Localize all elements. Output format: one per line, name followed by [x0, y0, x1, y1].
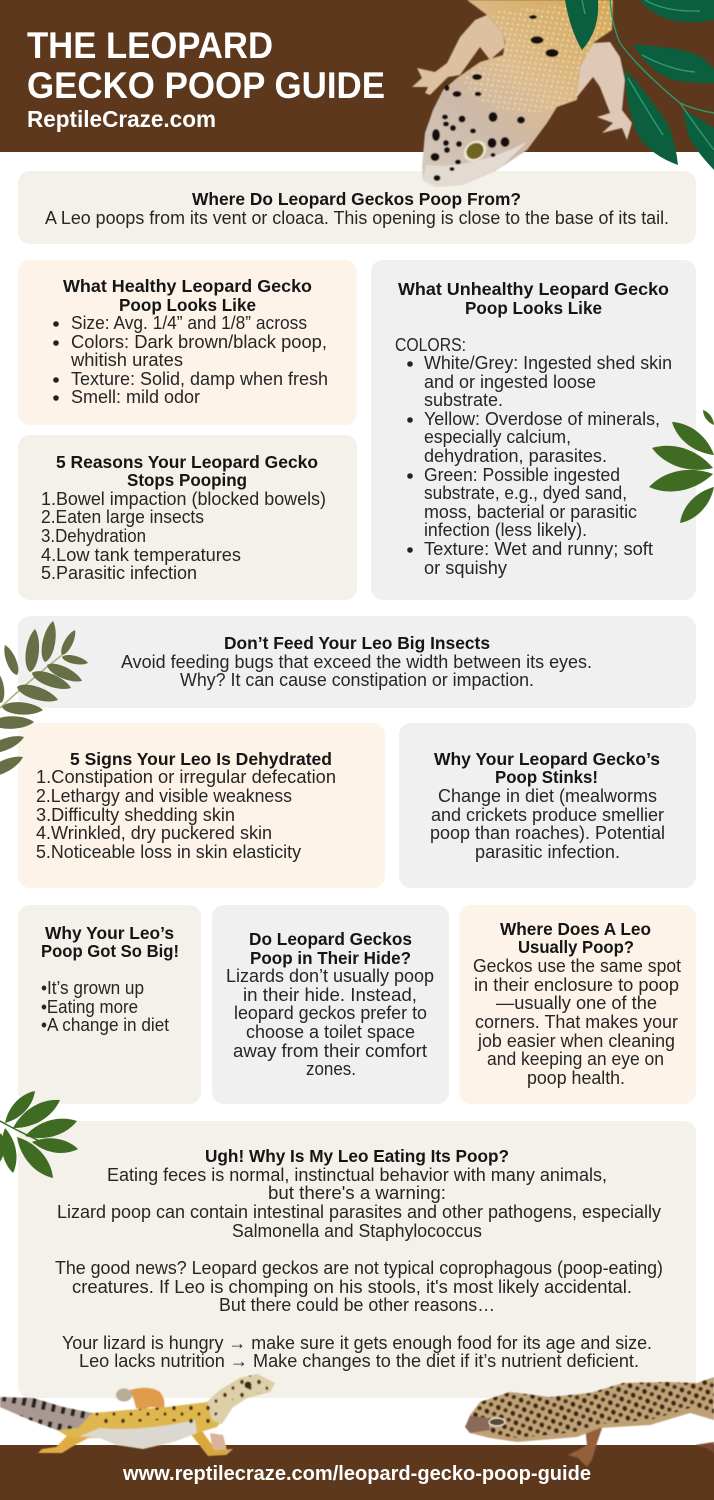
- tail: [0, 1397, 92, 1430]
- panel: unhealthy poop: substrate, e.g., dyed sand,: [424, 483, 627, 503]
- icon: olive leaves left: [0, 620, 89, 780]
- header band: [0, 0, 714, 152]
- panel: poop in hide: choose a toilet space: [246, 1022, 415, 1042]
- panel: where leo usually poops: in their enclosure to poop: [474, 975, 679, 995]
- body: [465, 1377, 714, 1442]
- panel: where do geckos poop from: A Leo poops from its vent or cloaca. This opening is close to the base of its tail.: [45, 208, 669, 228]
- body: [0, 1374, 275, 1449]
- panel: why poop got big: •A change in diet: [41, 1015, 169, 1035]
- panel: where leo usually poops: job easier when cleaning: [477, 1031, 675, 1051]
- panel: why poop got big: Poop Got So Big!: [41, 941, 179, 961]
- snout: [465, 1416, 490, 1433]
- panel: unhealthy poop: Green: Possible ingested: [424, 465, 620, 485]
- panel: signs of dehydration: 5.Noticeable loss in skin elasticity: [36, 842, 301, 862]
- footer band: [0, 1445, 714, 1500]
- panel: don't feed big insects: Avoid feeding bugs that exceed the width between its eyes.: [121, 652, 592, 672]
- title: GECKO POOP GUIDE: [27, 65, 385, 106]
- panel: unhealthy poop: moss, bacterial or parasitic: [424, 502, 637, 522]
- panel: signs of dehydration: 4.Wrinkled, dry puckered skin: [36, 823, 272, 843]
- panel: signs of dehydration: 5 Signs Your Leo Is Dehydrated: [70, 749, 332, 769]
- panel: poop in hide: Poop in Their Hide?: [250, 948, 411, 968]
- panel: reasons gecko stops pooping: 5.Parasitic infection: [41, 563, 197, 583]
- panel: healthy poop: Poop Looks Like: [119, 295, 256, 315]
- panel: healthy poop: Smell: mild odor: [71, 387, 200, 407]
- panel: why poop stinks: Why Your Leopard Gecko’s: [434, 749, 660, 769]
- panel: don't feed big insects: [18, 616, 696, 708]
- panel: why poop stinks: poop than roaches). Potential: [430, 823, 665, 843]
- panel: unhealthy poop: infection (less likely).: [424, 520, 587, 540]
- panel: healthy poop: Size: Avg. 1/4” and 1/8” across: [71, 313, 307, 333]
- panel: unhealthy poop: or squishy: [424, 558, 507, 578]
- panel: where leo usually poops: Geckos use the same spot: [473, 956, 681, 976]
- panel: reasons gecko stops pooping: [18, 435, 357, 600]
- panel: poop in hide: [212, 905, 449, 1104]
- title: THE LEOPARD: [27, 25, 273, 66]
- panel: eating its poop: Eating feces is normal, instinctual behavior with many animals,: [107, 1165, 607, 1185]
- illustration: gecko top: [412, 0, 632, 187]
- panel: signs of dehydration: 2.Lethargy and visible weakness: [36, 786, 292, 806]
- head: [207, 1374, 275, 1424]
- panel: signs of dehydration: [18, 723, 385, 888]
- panel: poop in hide: in their hide. Instead,: [243, 985, 417, 1005]
- panel: why poop stinks: Change in diet (mealworms: [438, 786, 657, 806]
- body spots: [430, 15, 558, 181]
- illustration: leaves top right: [565, 0, 714, 170]
- panel: eating its poop: But there could be other reasons…: [219, 1295, 495, 1315]
- panel: poop in hide: zones.: [306, 1059, 356, 1079]
- illustration: spotted gecko bottom right: [465, 1377, 714, 1467]
- panel: where leo usually poops: corners. That makes your: [475, 1012, 678, 1032]
- panel: healthy poop: Colors: Dark brown/black poop,: [71, 332, 327, 352]
- title: [27, 25, 385, 106]
- panel: unhealthy poop: substrate.: [424, 390, 503, 410]
- panel: why poop stinks: parasitic infection.: [475, 842, 620, 862]
- panel: why poop stinks: [399, 723, 696, 888]
- panel: unhealthy poop: [371, 260, 696, 600]
- panel: why poop stinks: Poop Stinks!: [495, 767, 598, 787]
- panel: poop in hide: leopard geckos prefer to: [234, 1003, 427, 1023]
- panel: where do geckos poop from: [18, 171, 696, 244]
- footer url: www.reptilecraze.com/leopard-gecko-poop-guide: [122, 1463, 591, 1485]
- panel: eating its poop: Salmonella and Staphylococcus: [232, 1221, 482, 1241]
- panel: why poop got big: •Eating more: [41, 997, 138, 1017]
- panel: where leo usually poops: Usually Poop?: [518, 937, 634, 957]
- panel: reasons gecko stops pooping: 2.Eaten large insects: [41, 507, 204, 527]
- panel: signs of dehydration: 3.Difficulty shedding skin: [36, 805, 235, 825]
- panel: healthy poop: Texture: Solid, damp when fresh: [71, 369, 328, 389]
- panel: where leo usually poops: Where Does A Leo: [500, 919, 651, 939]
- icon: green leaves lower left: [0, 1086, 79, 1183]
- panel: where do geckos poop from: Where Do Leopard Geckos Poop From?: [192, 189, 521, 209]
- panel: unhealthy poop: dehydration, parasites.: [424, 446, 607, 466]
- panel: where leo usually poops: [459, 905, 696, 1104]
- panel: reasons gecko stops pooping: Stops Pooping: [127, 470, 247, 490]
- panel: eating its poop: Ugh! Why Is My Leo Eating Its Poop?: [205, 1146, 509, 1166]
- panel: healthy poop: [18, 260, 357, 425]
- panel: eating its poop: The good news? Leopard geckos are not typical coprophagous (poop-eating): [55, 1258, 663, 1278]
- panel: unhealthy poop: Texture: Wet and runny; soft: [424, 539, 653, 559]
- panel: unhealthy poop: especially calcium,: [424, 427, 571, 447]
- panel: signs of dehydration: 1.Constipation or irregular defecation: [36, 767, 336, 787]
- panel: eating its poop: [18, 1121, 696, 1398]
- panel: eating its poop: creatures. If Leo is chomping on his stools, it's most likely accidental.: [72, 1277, 632, 1297]
- panel: unhealthy poop: What Unhealthy Leopard Gecko: [398, 279, 669, 299]
- panel: eating its poop: Your lizard is hungry → make sure it gets enough food for its age and size.: [62, 1333, 652, 1353]
- panel: why poop got big: Why Your Leo’s: [45, 923, 174, 943]
- panel: unhealthy poop: COLORS:: [395, 335, 466, 355]
- panel: don't feed big insects: Don’t Feed Your Leo Big Insects: [224, 633, 490, 653]
- panel: unhealthy poop: White/Grey: Ingested shed skin: [424, 353, 672, 373]
- panel: where leo usually poops: poop health.: [527, 1068, 625, 1088]
- panel: reasons gecko stops pooping: 1.Bowel impaction (blocked bowels): [41, 489, 326, 509]
- panel: reasons gecko stops pooping: 3.Dehydration: [41, 526, 146, 546]
- panel: unhealthy poop: Poop Looks Like: [465, 298, 602, 318]
- rear foot: [695, 1442, 714, 1453]
- panel: eating its poop: Leo lacks nutrition → Make changes to the diet if it’s nutrient deficient.: [79, 1351, 639, 1371]
- panel: unhealthy poop: Yellow: Overdose of minerals,: [424, 409, 660, 429]
- front leg: [568, 1425, 603, 1467]
- panel: poop in hide: Do Leopard Geckos: [249, 929, 412, 949]
- panel: healthy poop: What Healthy Leopard Gecko: [63, 276, 312, 296]
- legs: [38, 1423, 100, 1453]
- panel: healthy poop: whitish urates: [70, 350, 183, 370]
- panel: don't feed big insects: Why? It can cause constipation or impaction.: [180, 670, 534, 690]
- panel: reasons gecko stops pooping: 5 Reasons Your Leopard Gecko: [56, 452, 318, 472]
- belly: [80, 1420, 197, 1449]
- panel: eating its poop: Lizard poop can contain intestinal parasites and other pathogens, especially: [57, 1202, 661, 1222]
- panel: eating its poop: but there's a warning:: [268, 1183, 446, 1203]
- website subtitle: ReptileCraze.com: [27, 106, 216, 132]
- panel: poop in hide: away from their comfort: [233, 1041, 427, 1061]
- panel: unhealthy poop: and or ingested loose: [424, 372, 596, 392]
- eye: [460, 136, 490, 166]
- illustration: yellow gecko bottom left: [0, 1374, 275, 1456]
- panel: why poop got big: •It’s grown up: [41, 978, 144, 998]
- panel: reasons gecko stops pooping: 4.Low tank temperatures: [41, 545, 241, 565]
- eye: [489, 1418, 505, 1426]
- panel: where leo usually poops: and keeping an eye on: [487, 1049, 664, 1069]
- panel: where leo usually poops: —usually one of the: [496, 993, 657, 1013]
- small orange gecko: [116, 1388, 164, 1410]
- panel: why poop got big: [18, 905, 201, 1104]
- panel: poop in hide: Lizards don’t usually poop: [226, 966, 434, 986]
- panel: why poop stinks: and crickets produce smellier: [431, 805, 664, 825]
- icon: green leaves right: [647, 408, 714, 528]
